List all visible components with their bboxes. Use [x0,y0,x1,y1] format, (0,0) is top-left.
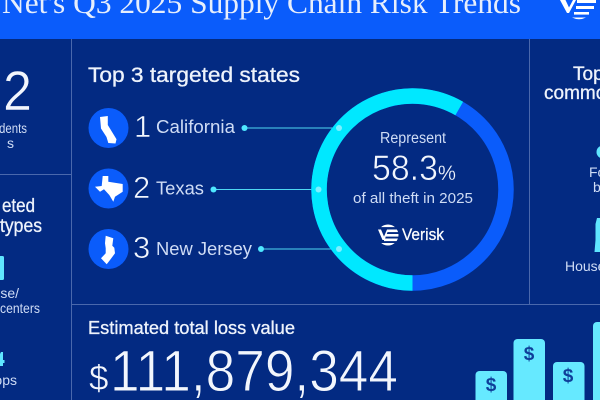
Verisk logo: Verisk [402,225,444,244]
icon: truck stops [0,352,4,366]
state row: California [88,108,339,148]
panel: incidents stat [0,59,32,151]
icon: Verisk logo mark [560,0,596,19]
heading: loss value: Estimated total loss value [88,317,295,338]
icon: household goods [594,218,600,252]
donut centre text: of all theft in 2025 [353,191,473,207]
panel: targeted location types [0,195,42,388]
heading: states: Top 3 targeted states [88,64,300,87]
heading: targeted types: eted [2,195,35,217]
bar chart: rising dollar bars: $ [563,366,574,387]
incidents caption: dents [0,120,27,136]
donut chart: 58.3% [319,96,506,283]
state row: Texas [88,168,318,208]
icon: warehouse [0,256,4,280]
state row: Texas: 2 [133,170,150,205]
state row: New Jersey: New Jersey [156,238,253,259]
loss value figure: $ [89,359,108,398]
panel: top commodities [544,64,600,274]
state row: California: California [156,116,236,137]
Verisk logo [376,224,444,246]
state row: California: 1 [134,109,151,144]
incidents caption: s [7,135,14,151]
bar chart: rising dollar bars: $ [524,344,535,365]
connector end dots [316,125,342,252]
donut centre text [353,130,473,207]
heading: targeted types: types [0,215,42,237]
donut centre text: Represent [380,130,447,147]
icon: food and beverage [596,146,600,158]
header band [0,0,600,39]
bar chart: rising dollar bars: $ [486,375,497,396]
bar chart: rising dollar bars [476,322,600,400]
panel: estimated total loss value [88,317,600,400]
incidents number: 2 [3,59,32,122]
state row: Texas: Texas [156,178,204,198]
warehouse caption: se/ [0,285,19,301]
donut centre text: 58.3% [372,149,456,188]
state row: New Jersey [88,229,339,269]
state row: New Jersey: 3 [133,230,150,265]
warehouse caption: centers [0,300,40,316]
panel: top 3 targeted states [88,64,506,283]
